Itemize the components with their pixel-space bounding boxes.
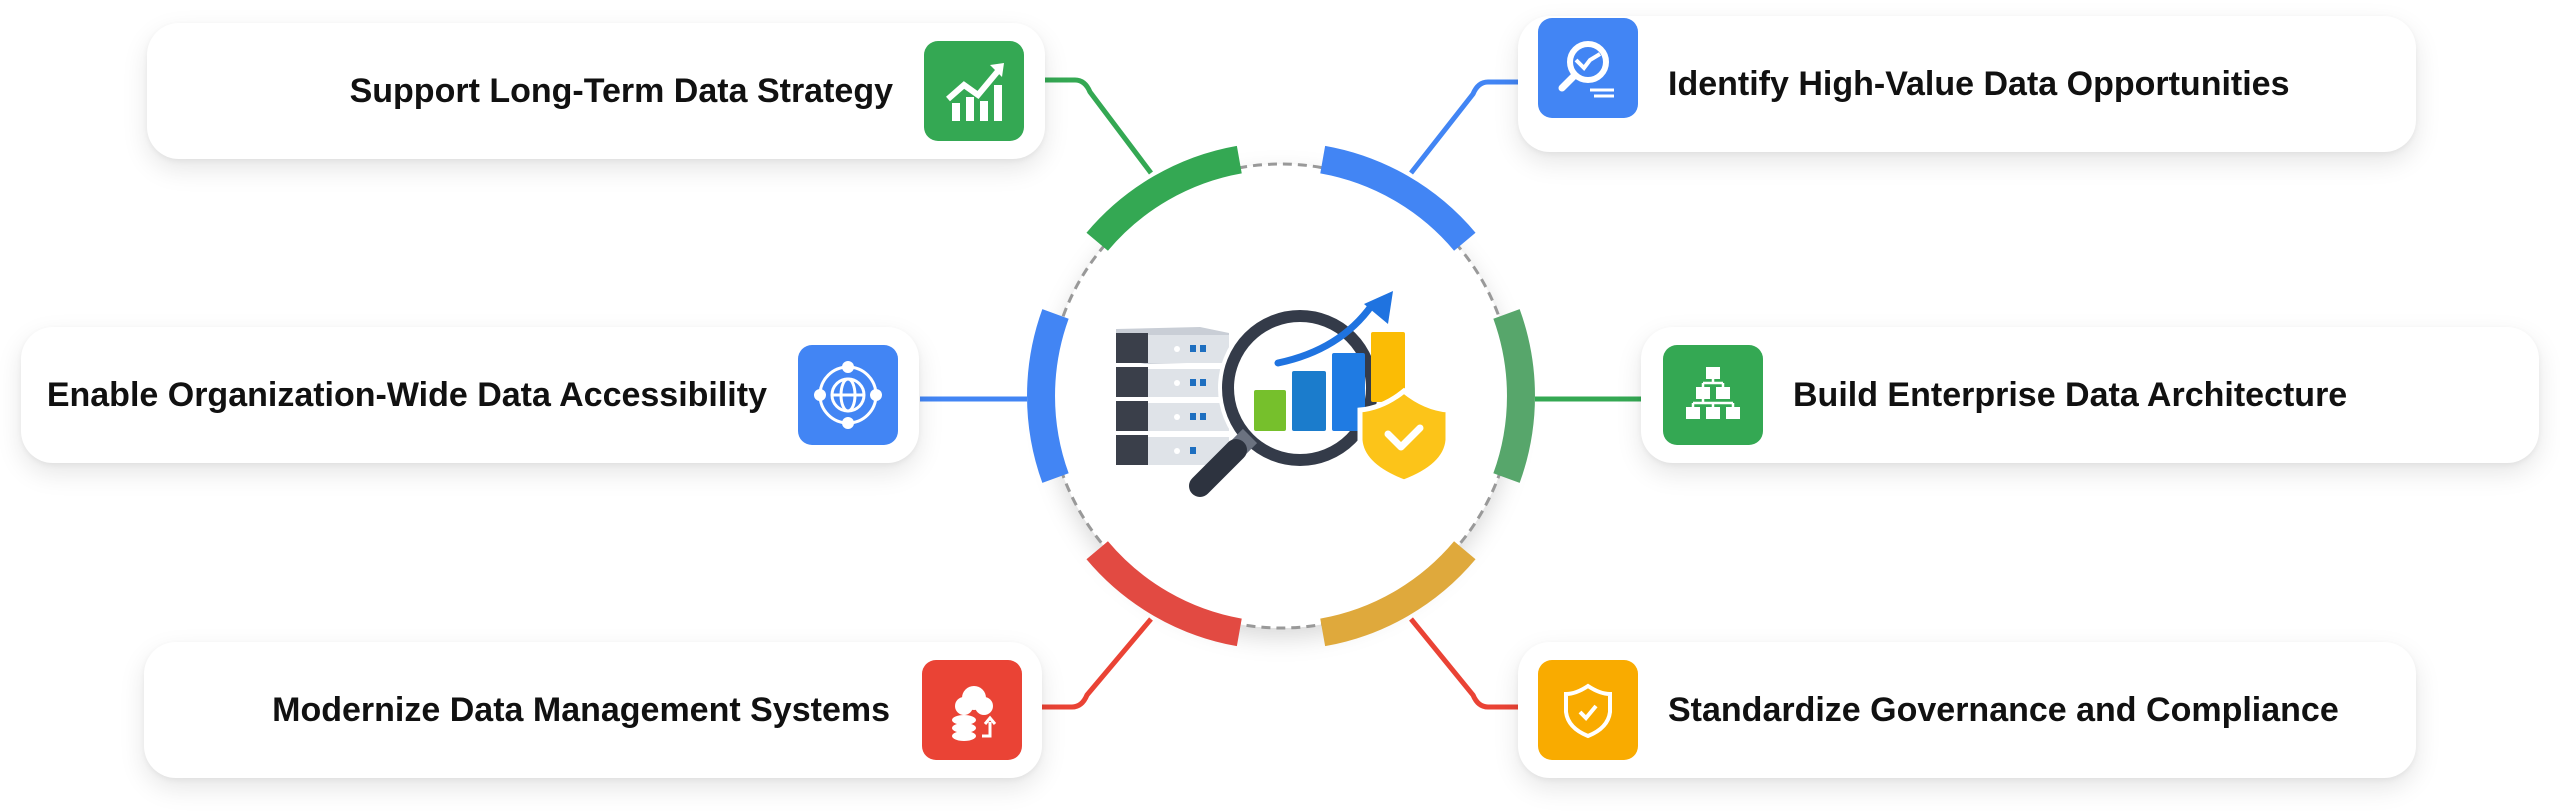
connector: architecture	[1535, 396, 1641, 402]
text: governance: Standardize Governance and Compliance	[1668, 691, 2339, 729]
illustration: servers, magnifier, chart, shield	[1116, 291, 1448, 486]
ring arcs	[1041, 160, 1521, 632]
icon: hierarchy	[1663, 345, 1763, 445]
icon: search target	[1538, 18, 1638, 118]
text: identify: Identify High-Value Data Opportunities	[1668, 65, 2290, 103]
card: Enable Organization-Wide Data Accessibility	[21, 327, 919, 463]
text: architecture: Build Enterprise Data Architecture	[1793, 376, 2347, 414]
connector: accessibility	[920, 396, 1027, 402]
hub circle	[1049, 164, 1513, 628]
text: accessibility: Enable Organization-Wide Data Accessibility	[47, 376, 767, 414]
text: modernize: Modernize Data Management Systems	[272, 691, 890, 729]
card: Modernize Data Management Systems	[144, 642, 1042, 778]
icon: cloud database	[922, 660, 1022, 760]
icon: shield	[1538, 660, 1638, 760]
icon: globe network	[798, 345, 898, 445]
card: Identify High-Value Data Opportunities	[1518, 16, 2416, 152]
card: Standardize Governance and Compliance	[1518, 642, 2416, 778]
card: Build Enterprise Data Architecture	[1641, 327, 2539, 463]
connector: strategy	[1045, 80, 1151, 173]
card: Support Long-Term Data Strategy	[147, 23, 1045, 159]
icon: growth chart	[924, 41, 1024, 141]
connector: governance	[1411, 619, 1518, 707]
text: strategy: Support Long-Term Data Strategy	[350, 72, 893, 110]
connector: modernize	[1042, 619, 1151, 707]
connector: identify	[1411, 82, 1518, 173]
